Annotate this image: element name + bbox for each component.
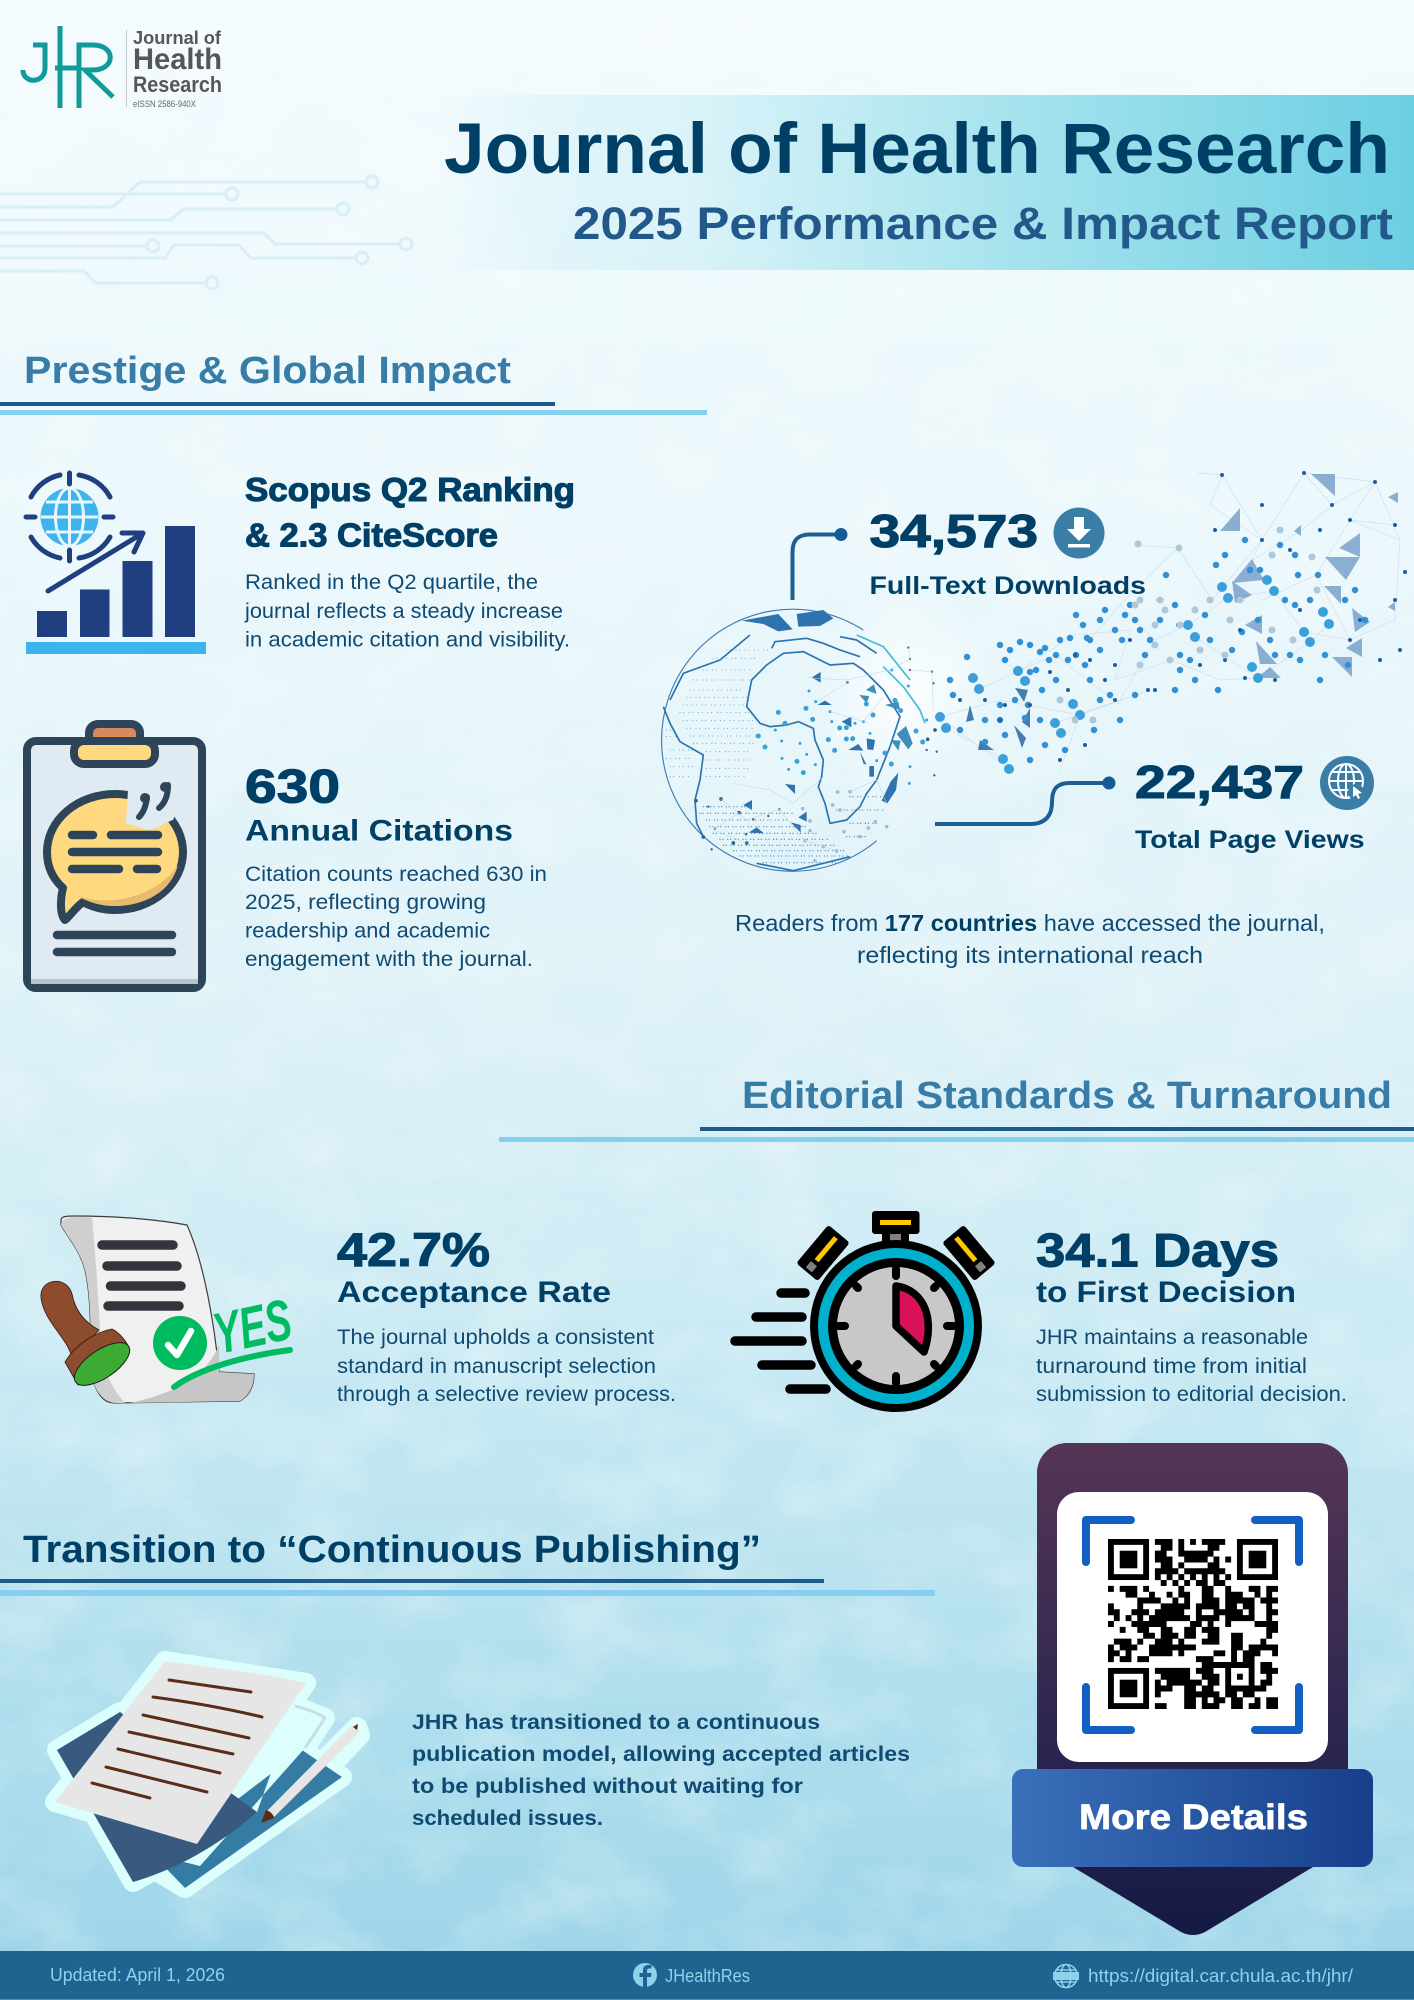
icon: stopwatch [735, 1211, 996, 1412]
logo: eISSN 2586-940X [133, 99, 196, 109]
connector: page views [935, 776, 1116, 824]
text block: acceptance rate: standard in manuscript selection [337, 1354, 656, 1378]
text block: days to first decision: 34.1 Days [1036, 1224, 1279, 1276]
icon: facebook [633, 1963, 657, 1987]
heading: Editorial Standards & Turnaround [499, 1075, 1414, 1142]
text block: acceptance rate: 42.7% [337, 1223, 490, 1276]
connector: downloads [792, 528, 848, 600]
text block: continuous publication: JHR has transitioned to a continuous [412, 1710, 820, 1734]
stat: 34,573 downloads: Full-Text Downloads [870, 572, 1146, 600]
text block: days to first decision: turnaround time from initial [1036, 1354, 1307, 1378]
scan corners [1086, 1520, 1299, 1730]
icon: www globe [1053, 1964, 1079, 1988]
text block: 630 Annual Citations: 630 [245, 760, 340, 812]
footer: Updated: April 1, 2026 [50, 1965, 225, 1985]
stippled dots [667, 650, 770, 777]
text block: 630 Annual Citations: engagement with the journal. [245, 947, 533, 971]
text block: Scopus Q2 Ranking: in academic citation and visibility. [245, 628, 570, 652]
icon: clipboard with speech bubble [27, 724, 202, 988]
text block: days to first decision: to First Decision [1036, 1276, 1296, 1309]
footer [0, 1951, 1414, 2000]
QR code [1108, 1542, 1278, 1706]
heading: Editorial Standards & Turnaround: Editorial Standards & Turnaround [742, 1075, 1392, 1117]
teal land masses [859, 684, 913, 751]
text block: 630 Annual Citations [245, 760, 547, 971]
header band [440, 95, 1414, 270]
heading: Transition to Continuous Publishing: Transition to “Continuous Publishing” [23, 1529, 761, 1571]
thin network lines [713, 648, 933, 851]
text block: days to first decision: submission to editorial decision. [1036, 1382, 1347, 1406]
logo [23, 26, 222, 109]
text block: Scopus Q2 Ranking: Scopus Q2 Ranking [245, 472, 575, 509]
panel: QR pin [1012, 1443, 1373, 1935]
text block: continuous publication: publication model, allowing accepted articles [412, 1742, 910, 1766]
small dark dots [960, 473, 1405, 760]
text block: continuous publication [412, 1710, 910, 1830]
dark land masses [742, 610, 898, 833]
heading: Prestige & Global Impact: Prestige & Global Impact [24, 350, 511, 392]
triangles [1220, 474, 1398, 678]
rubber stamp [41, 1281, 136, 1394]
large dots [940, 580, 1329, 769]
icon: stack of papers and pencil [55, 1661, 360, 1888]
text block: 630 Annual Citations: Citation counts reached 630 in [245, 862, 547, 886]
icon: web globe with cursor [1320, 756, 1374, 810]
stat: 22,437 page views: 22,437 [1135, 756, 1304, 808]
medium dots [950, 540, 1365, 760]
text block: acceptance rate: through a selective review process. [337, 1382, 676, 1406]
logo: Research [133, 72, 222, 97]
footer: JHealthRes [665, 1966, 750, 1986]
pale dots [1060, 530, 1317, 720]
circuit lines decoration [0, 176, 412, 289]
text block: days to first decision: JHR maintains a reasonable [1036, 1325, 1308, 1349]
pencil [261, 1723, 359, 1823]
globe rim [662, 609, 877, 871]
caption: readers from 177 countries: reflecting its international reach [857, 942, 1203, 968]
text block: days to first decision [1036, 1224, 1347, 1406]
text block: Scopus Q2 Ranking: journal reflects a steady increase [244, 599, 563, 623]
heading: Transition to Continuous Publishing [0, 1529, 935, 1596]
text block: 630 Annual Citations: Annual Citations [245, 814, 513, 848]
stat: 22,437 page views [1135, 756, 1374, 854]
text block: 630 Annual Citations: readership and academic [245, 918, 490, 942]
speed lines [735, 1293, 826, 1389]
text block: 630 Annual Citations: 2025, reflecting growing [245, 890, 486, 914]
illustration: data particles network [940, 473, 1405, 770]
button: More Details [1012, 1769, 1373, 1867]
icon: approved document with stamp: YES [208, 1287, 298, 1367]
title: Journal of Health Research [444, 110, 1390, 189]
blue data dots [758, 700, 923, 773]
stat: 34,573 downloads: 34,573 [870, 505, 1038, 557]
heading: Prestige & Global Impact [0, 350, 707, 415]
text block: acceptance rate: Acceptance Rate [337, 1276, 611, 1309]
text block: acceptance rate: The journal upholds a consistent [337, 1325, 654, 1349]
logo mark: JHR [23, 26, 113, 108]
logo: Health [133, 43, 222, 76]
text block: Scopus Q2 Ranking: Ranked in the Q2 quartile, the [245, 570, 538, 594]
halo [55, 1661, 360, 1888]
stat: 22,437 page views: Total Page Views [1135, 826, 1364, 854]
text block: acceptance rate [337, 1223, 676, 1406]
text block: continuous publication: to be published without waiting for [412, 1774, 804, 1798]
icon: approved document with stamp [41, 1216, 298, 1403]
continents outlines [663, 635, 925, 871]
caption: readers from 177 countries [735, 910, 1325, 968]
subtitle: 2025 Performance & Impact Report [573, 198, 1393, 249]
icon: globe and bar chart [26, 473, 206, 654]
stat: 34,573 downloads [870, 505, 1146, 600]
text block: continuous publication: scheduled issues. [412, 1806, 603, 1830]
text block: Scopus Q2 Ranking: & 2.3 CiteScore [245, 518, 498, 554]
glow behind globe edge [815, 580, 995, 800]
icon: download [1054, 508, 1104, 558]
button: More Details: More Details [1079, 1798, 1308, 1837]
logo: Journal of [133, 28, 222, 48]
illustration: particle globe [662, 609, 937, 871]
text block: Scopus Q2 Ranking [244, 472, 575, 652]
caption: readers from 177 countries: Readers from 177 countries have accessed the journal, [735, 910, 1325, 936]
footer: https://digital.car.chula.ac.th/jhr/ [1088, 1966, 1353, 1986]
network lines [940, 473, 1400, 770]
